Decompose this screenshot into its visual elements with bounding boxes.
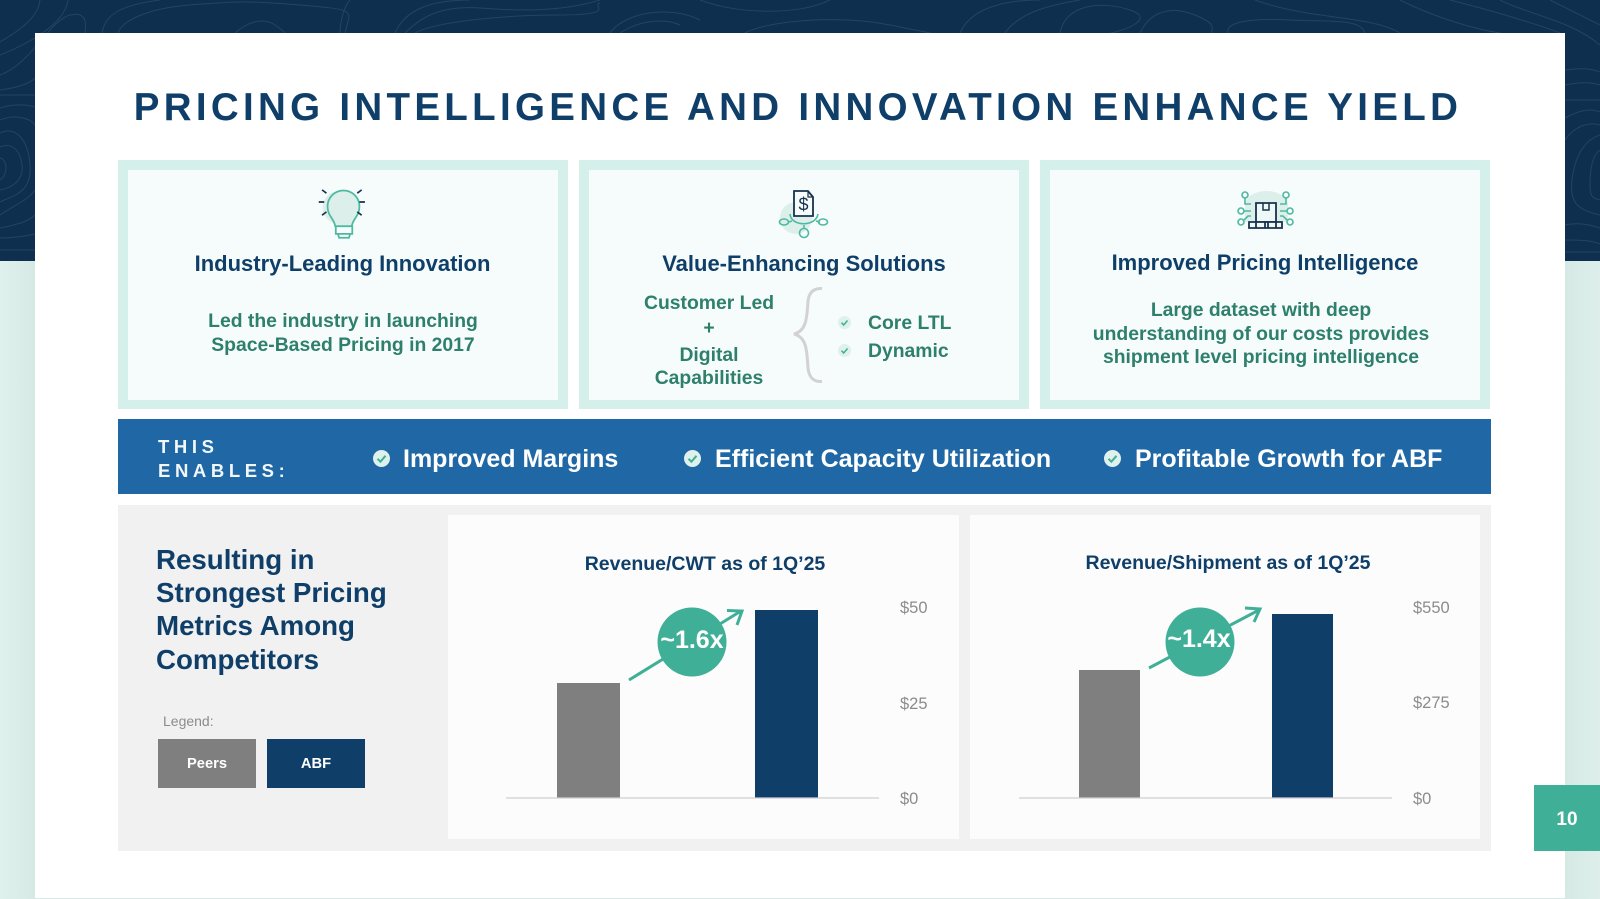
results heading: Metrics Among — [156, 610, 355, 641]
left text — [644, 292, 774, 389]
body text — [208, 310, 478, 356]
brace — [794, 287, 822, 383]
heading: Value-Enhancing Solutions — [662, 251, 946, 276]
chart svg: Revenue/CWT bars — [506, 553, 928, 808]
benefit: Improved Margins: Improved Margins — [403, 445, 618, 473]
check item: Dynamic: Dynamic — [868, 340, 949, 362]
chart svg: Revenue/CWT bars: ~1.6x — [660, 626, 724, 654]
results heading — [156, 544, 387, 675]
left text: Capabilities — [655, 367, 763, 389]
chart svg: Revenue/Shipment bars: Revenue/Shipment as of 1Q’25 — [1085, 552, 1371, 574]
chart svg: Revenue/Shipment bars: $0 — [1413, 790, 1431, 808]
chart svg: Revenue/Shipment bars — [1019, 552, 1450, 808]
legend item: Peers: Peers — [187, 756, 227, 772]
background: contour lines — [0, 0, 1600, 252]
icon: check — [373, 450, 390, 467]
chart svg: Revenue/CWT bars: $25 — [900, 695, 928, 713]
chart svg: Revenue/Shipment bars: ~1.4x — [1167, 625, 1231, 653]
heading: Improved Pricing Intelligence — [1112, 250, 1418, 275]
banner label — [158, 436, 289, 480]
icon: light bulb — [318, 189, 365, 239]
body text: Led the industry in launching — [208, 310, 478, 332]
results heading: Strongest Pricing — [156, 577, 387, 608]
results heading: Competitors — [156, 644, 319, 675]
chart svg: Revenue/CWT bars: $0 — [900, 790, 918, 808]
page number — [1534, 785, 1600, 851]
background: dark topographic band — [0, 0, 1600, 261]
body text: understanding of our costs provides — [1093, 322, 1429, 344]
legend item: ABF: ABF — [301, 756, 331, 772]
legend item: Peers — [158, 739, 256, 788]
banner label: THIS — [158, 436, 219, 457]
chart: Revenue/Shipment — [970, 515, 1480, 839]
body text: Large dataset with deep — [1151, 299, 1371, 321]
legend item: ABF — [267, 739, 365, 788]
panel: Improved Pricing Intelligence — [1040, 160, 1490, 409]
chart svg: Revenue/Shipment bars: $550 — [1413, 599, 1450, 617]
banner: this enables — [118, 419, 1491, 494]
icon: package with circuit nodes — [1237, 191, 1294, 229]
results heading: Resulting in — [156, 544, 314, 575]
body text — [1093, 299, 1429, 368]
panel: Industry-Leading Innovation — [118, 160, 568, 409]
benefit: Efficient Capacity Utilization: Efficient Capacity Utilization — [715, 445, 1051, 473]
left text: Digital — [679, 344, 739, 366]
chart svg: Revenue/CWT bars: Revenue/CWT as of 1Q’25 — [585, 553, 825, 575]
title: PRICING INTELLIGENCE AND INNOVATION ENHANCE YIELD — [134, 86, 1462, 129]
background: light teal lower side strips — [0, 261, 1600, 899]
heading: Industry-Leading Innovation — [195, 251, 490, 276]
checklist — [838, 312, 951, 362]
left text: Customer Led + — [644, 292, 774, 338]
banner label: ENABLES: — [158, 460, 289, 480]
chart svg: Revenue/Shipment bars: $275 — [1413, 694, 1450, 712]
chart svg: Revenue/CWT bars: $50 — [900, 599, 928, 617]
check item: Core LTL: Core LTL — [868, 312, 951, 334]
body text: shipment level pricing intelligence — [1103, 346, 1419, 368]
icon: check — [684, 450, 701, 467]
icon: invoice with nodes: $ — [798, 194, 809, 214]
benefit: Profitable Growth for ABF: Profitable Growth for ABF — [1135, 445, 1442, 473]
panel: results — [118, 505, 1491, 851]
icon: invoice with nodes — [778, 190, 828, 238]
legend title: Legend: — [163, 713, 214, 729]
body text: Space-Based Pricing in 2017 — [211, 334, 475, 356]
legend — [158, 713, 365, 788]
panel: Value-Enhancing Solutions — [579, 160, 1029, 409]
chart: Revenue/CWT — [448, 515, 959, 839]
icon: check — [1104, 450, 1121, 467]
page number: 10 — [1556, 809, 1578, 830]
